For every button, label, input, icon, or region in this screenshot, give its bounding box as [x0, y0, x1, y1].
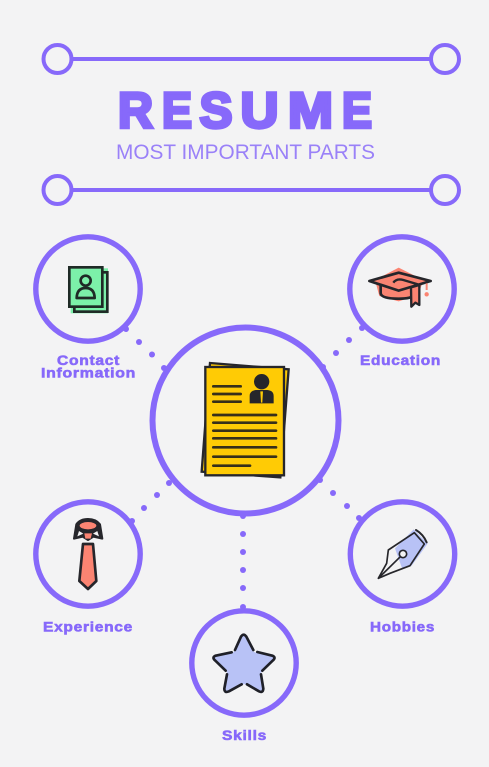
icon: star — [213, 634, 275, 692]
label: contact information: Contact — [57, 353, 120, 368]
title: R — [118, 82, 153, 138]
title: U — [240, 82, 278, 138]
label: education: Education — [360, 353, 441, 368]
icon: graduation cap — [369, 268, 431, 307]
label: contact information — [41, 353, 136, 380]
title: S — [200, 82, 232, 138]
label: experience: Experience — [43, 620, 133, 634]
icon: fountain pen nib — [378, 529, 428, 578]
subtitle: MOST IMPORTANT PARTS — [116, 141, 375, 164]
title: E — [342, 82, 372, 138]
panel: education — [350, 237, 454, 368]
panel: contact information — [36, 237, 140, 380]
title — [118, 82, 372, 138]
top connector line — [44, 45, 459, 73]
icon: resume document — [202, 363, 289, 477]
label: contact information: Information — [41, 366, 136, 380]
title: E — [162, 82, 192, 138]
panel: skills — [192, 611, 296, 743]
dotted connectors — [123, 325, 365, 610]
central circle — [152, 328, 338, 514]
title: M — [288, 82, 333, 138]
icon: contact card — [69, 267, 108, 313]
panel: hobbies — [350, 502, 455, 634]
bottom connector line — [44, 176, 459, 204]
panel: experience — [36, 502, 140, 634]
icon: necktie — [74, 519, 102, 589]
label: hobbies: Hobbies — [370, 620, 435, 634]
label: skills: Skills — [222, 728, 267, 743]
